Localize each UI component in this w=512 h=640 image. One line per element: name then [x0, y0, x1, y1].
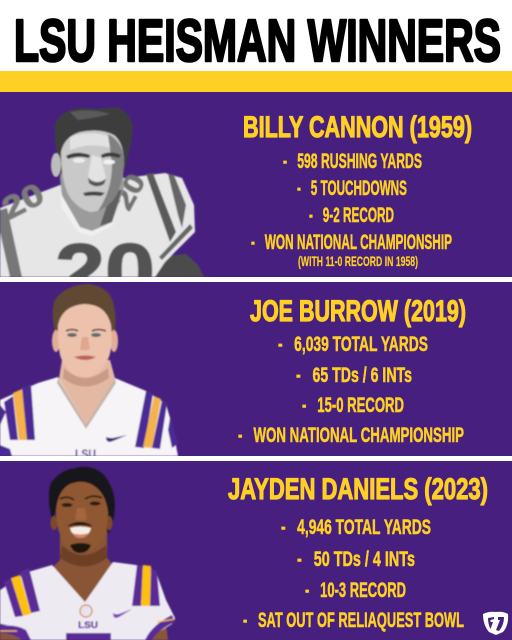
panel: Billy Cannon — [0, 92, 512, 277]
chest number: 20 — [55, 229, 155, 314]
left shoulder stripes — [4, 578, 23, 617]
photo: Jayden Daniels — [0, 467, 175, 640]
panel: Jayden Daniels — [0, 461, 512, 640]
eyes and brows — [66, 152, 121, 159]
stat: touchdowns and interceptions: - 65 TDs / 6 INTs — [296, 364, 412, 387]
jersey — [0, 377, 178, 456]
hair — [52, 283, 116, 332]
stat: total yards: - 4,946 TOTAL YARDS — [281, 516, 431, 539]
face — [58, 304, 112, 377]
ears — [52, 330, 60, 352]
goatee — [70, 543, 91, 553]
LSU wordmark: LSU — [75, 447, 96, 461]
moustache — [68, 522, 92, 526]
neck — [52, 530, 113, 602]
panel: Joe Burrow — [0, 282, 512, 461]
stat: touchdowns and interceptions: - 50 TDs / 4 INTs — [297, 548, 415, 571]
ear — [51, 153, 61, 177]
nike swoosh — [113, 609, 132, 618]
sleeve number right: 20 — [108, 169, 151, 215]
right shoulder stripes — [132, 565, 143, 606]
hair — [49, 467, 115, 534]
sleeve stripes — [0, 208, 22, 277]
face — [61, 131, 124, 212]
stat: touchdowns: - 5 TOUCHDOWNS — [297, 177, 407, 200]
stat: total yards: - 6,039 TOTAL YARDS — [278, 333, 428, 356]
hair — [55, 107, 133, 175]
smile — [70, 526, 91, 537]
stat: record: - 9-2 RECORD — [309, 204, 394, 227]
photo: Joe Burrow — [0, 284, 178, 461]
stat: record: - 15-0 RECORD — [302, 394, 404, 417]
ears — [50, 516, 58, 530]
gold banner stripe — [0, 71, 512, 92]
stat note: (WITH 11-0 RECORD IN 1958) — [298, 253, 418, 269]
icon: FanDuel shield logo — [483, 612, 508, 635]
neck — [59, 172, 125, 232]
arms — [0, 627, 168, 640]
right shoulder stripes — [135, 391, 153, 448]
sleeve marks — [0, 405, 178, 456]
SEC patch — [80, 605, 92, 617]
face — [56, 482, 108, 552]
left shoulder stripes — [4, 396, 18, 440]
photo: Billy Cannon — [0, 106, 204, 277]
arm — [152, 254, 204, 277]
sleeve cuffs — [0, 615, 175, 640]
LSU wordmark: LSU — [78, 620, 98, 631]
jersey number top — [66, 633, 111, 640]
nike swoosh — [106, 435, 127, 442]
jersey — [0, 173, 195, 277]
nose — [88, 155, 106, 182]
neck — [58, 360, 116, 425]
jersey — [0, 562, 175, 640]
stat: record: - 10-3 RECORD — [305, 579, 406, 602]
